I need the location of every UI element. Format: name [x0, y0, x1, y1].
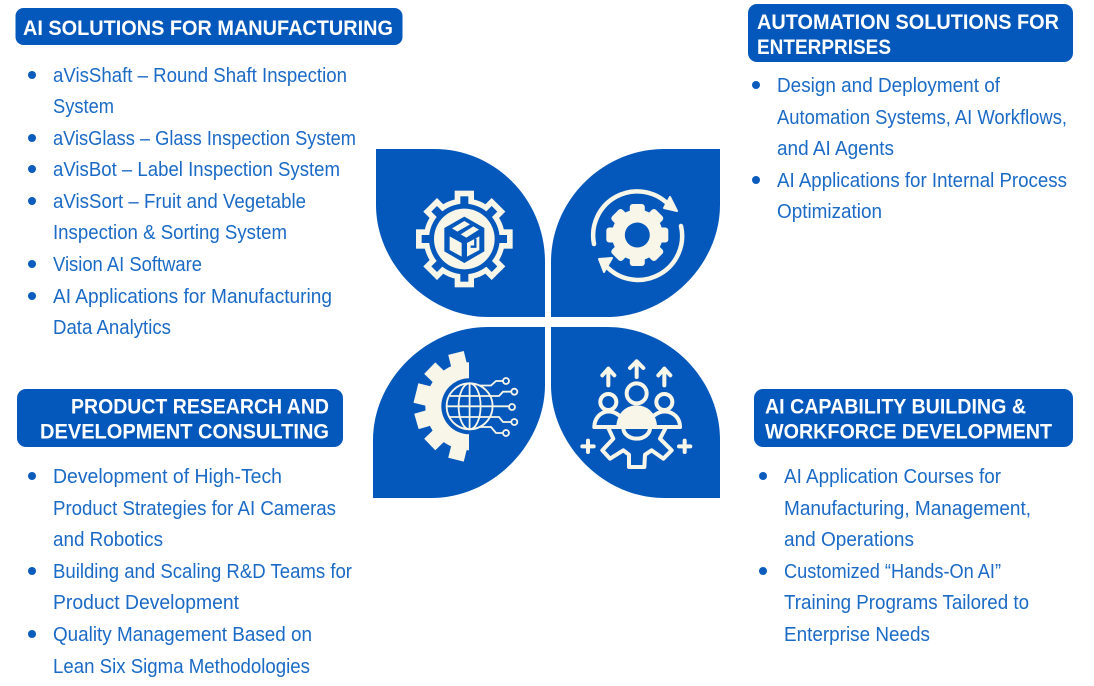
heading: AI solutions for manufacturing: [16, 8, 402, 45]
bullet list: manufacturing products: Inspection & Sorting System: [53, 222, 287, 244]
leaf: top left with gear and box: [376, 149, 545, 317]
icon: gear with box: [416, 191, 513, 287]
bullet list: consulting services: Lean Six Sigma Methodologies: [53, 656, 310, 678]
bullet list: automation services: [752, 75, 1067, 223]
bullet list: training programs: AI Application Courses for: [784, 466, 1001, 488]
heading: automation solutions for enterprises: ENTERPRISES: [757, 36, 891, 59]
bullet list: manufacturing products: Vision AI Software: [53, 254, 202, 276]
central four-leaf diagram: [373, 149, 720, 498]
bullet list: consulting services: Product Strategies for AI Cameras: [53, 498, 336, 520]
heading: AI capability building and workforce development: AI CAPABILITY BUILDING &: [765, 396, 1026, 418]
bullet list: manufacturing products: [28, 65, 356, 339]
bullet list: manufacturing products: AI Applications for Manufacturing: [53, 286, 332, 308]
heading: automation solutions for enterprises: AUTOMATION SOLUTIONS FOR: [757, 11, 1059, 34]
icon: half gear with network globe: [414, 351, 517, 462]
bullet list: training programs: Manufacturing, Management,: [784, 498, 1031, 520]
bullet list: automation services: and AI Agents: [777, 138, 894, 160]
bullet list: manufacturing products: aVisBot – Label Inspection System: [53, 159, 340, 181]
leaf: bottom left with gear and globe: [373, 327, 545, 498]
bullet list: consulting services: Product Development: [53, 592, 239, 614]
leaf: bottom right with team and gear: [551, 327, 720, 498]
bullet list: manufacturing products: System: [53, 96, 114, 118]
bullet list: consulting services: and Robotics: [53, 529, 163, 551]
panel: product research and development consulting: [17, 389, 352, 678]
bullet list: automation services: Design and Deployment of: [777, 75, 1000, 97]
bullet list: automation services: Automation Systems, AI Workflows,: [777, 107, 1067, 129]
bullet list: consulting services: Building and Scaling R&D Teams for: [53, 561, 352, 583]
heading: product research and development consulting: PRODUCT RESEARCH AND: [71, 396, 329, 418]
bullet list: training programs: Training Programs Tailored to: [784, 592, 1029, 614]
bullet list: consulting services: Development of High-Tech: [53, 466, 282, 488]
heading: product research and development consulting: [17, 389, 343, 447]
heading: AI capability building and workforce development: [754, 389, 1073, 447]
bullet list: training programs: and Operations: [784, 529, 914, 551]
bullet list: training programs: Customized “Hands-On AI”: [784, 561, 1001, 583]
icon: team with gear and upward arrows: [582, 361, 690, 467]
bullet list: manufacturing products: aVisShaft – Round Shaft Inspection: [53, 65, 347, 87]
bullet list: automation services: AI Applications for Internal Process: [777, 170, 1067, 192]
bullet list: training programs: Enterprise Needs: [784, 624, 930, 646]
bullet list: manufacturing products: aVisSort – Fruit and Vegetable: [53, 191, 306, 213]
bullet list: training programs: [759, 466, 1031, 646]
heading: automation solutions for enterprises: [748, 4, 1073, 62]
panel: AI solutions for manufacturing: [16, 8, 402, 339]
bullet list: manufacturing products: aVisGlass – Glass Inspection System: [53, 128, 356, 150]
heading: AI solutions for manufacturing: AI SOLUTIONS FOR MANUFACTURING: [23, 17, 393, 40]
bullet list: automation services: Optimization: [777, 201, 882, 223]
panel: automation solutions for enterprises: [748, 4, 1073, 223]
heading: AI capability building and workforce development: WORKFORCE DEVELOPMENT: [765, 420, 1052, 444]
bullet list: manufacturing products: Data Analytics: [53, 317, 171, 339]
bullet list: consulting services: [28, 466, 352, 678]
leaf: top right with gear and cycle arrows: [551, 149, 720, 317]
panel: AI capability building and workforce development: [754, 389, 1073, 646]
icon: gear with cycle arrows: [593, 191, 682, 280]
heading: product research and development consulting: DEVELOPMENT CONSULTING: [40, 420, 329, 444]
bullet list: consulting services: Quality Management Based on: [53, 624, 312, 646]
